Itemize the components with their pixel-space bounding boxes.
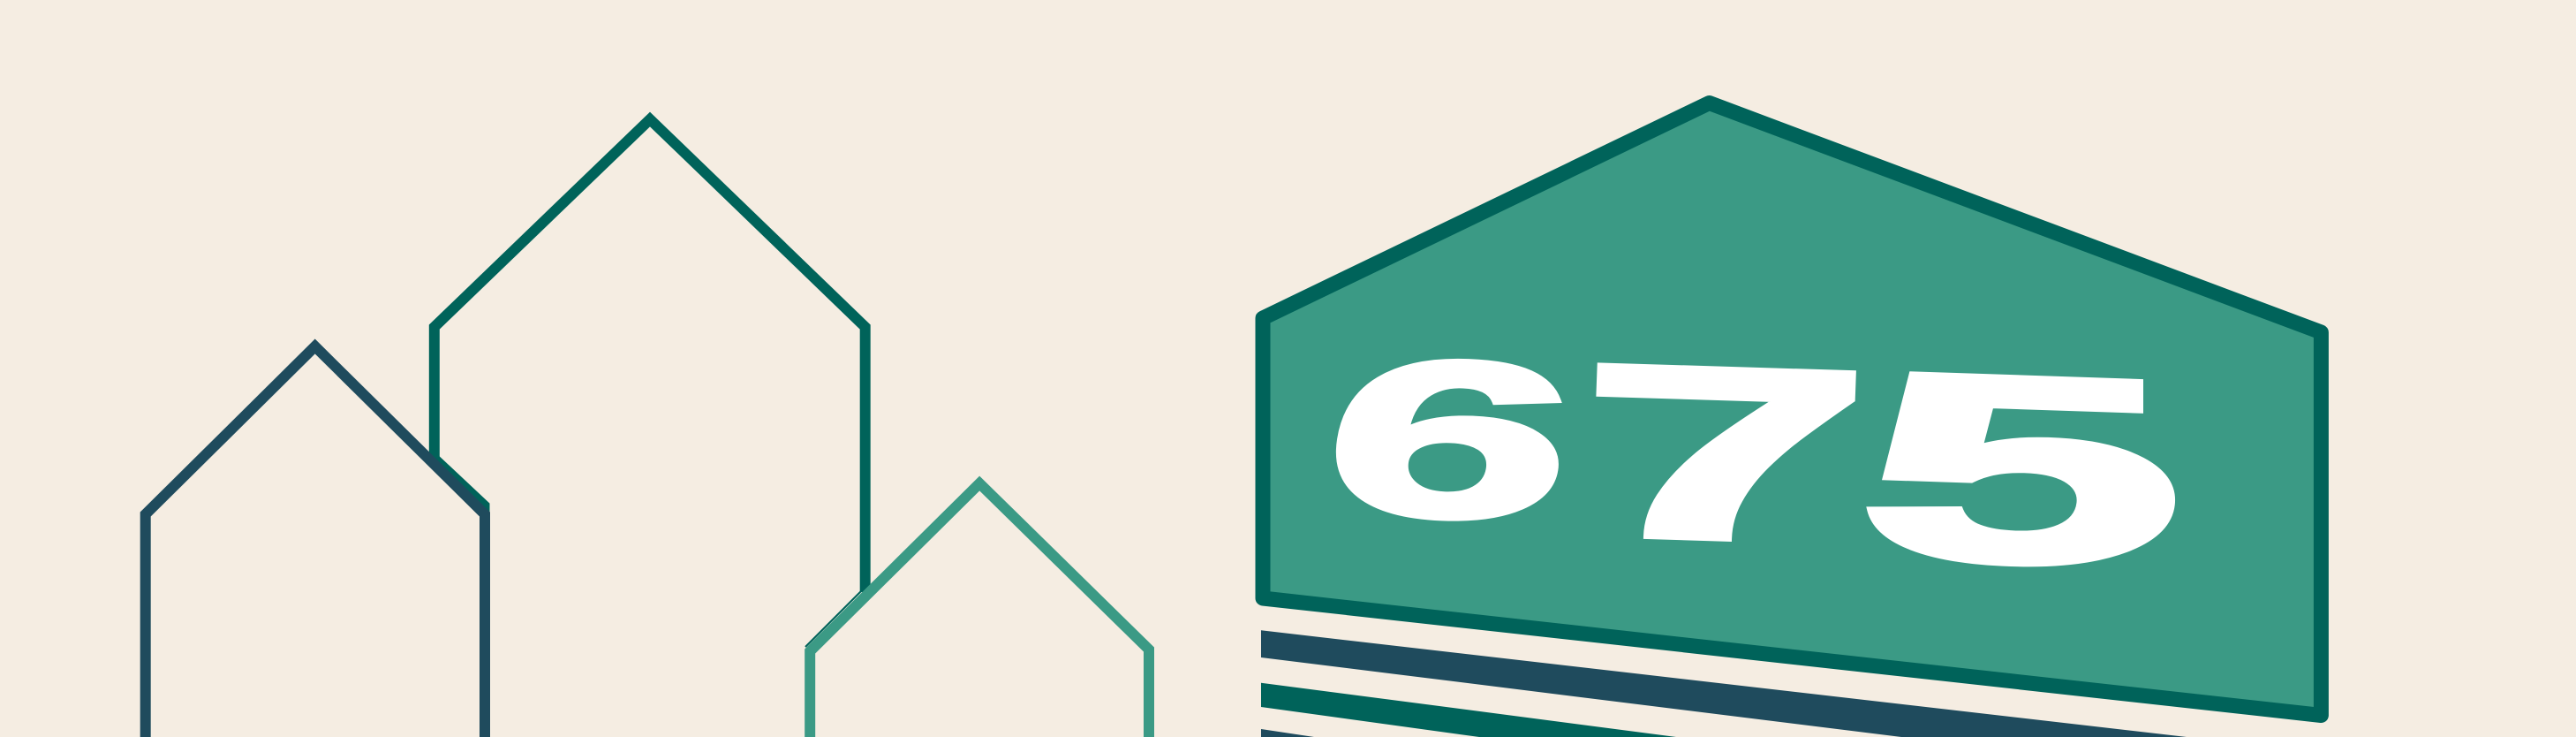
panel: solid house with number bbox=[1263, 103, 2321, 716]
number: 675: 6 bbox=[1307, 311, 1592, 568]
infographic canvas bbox=[140, 95, 2329, 737]
icon: left outlined house bbox=[146, 346, 485, 737]
number: 675: 7 bbox=[1574, 312, 1874, 595]
number: 675 bbox=[1335, 359, 2176, 567]
solid house shape bbox=[1263, 103, 2321, 716]
number: 675: 5 bbox=[1846, 316, 2204, 622]
stripes below house bbox=[1261, 630, 2187, 737]
icon: tall outlined house bbox=[428, 119, 865, 647]
icon: right outlined house bbox=[810, 483, 1149, 737]
